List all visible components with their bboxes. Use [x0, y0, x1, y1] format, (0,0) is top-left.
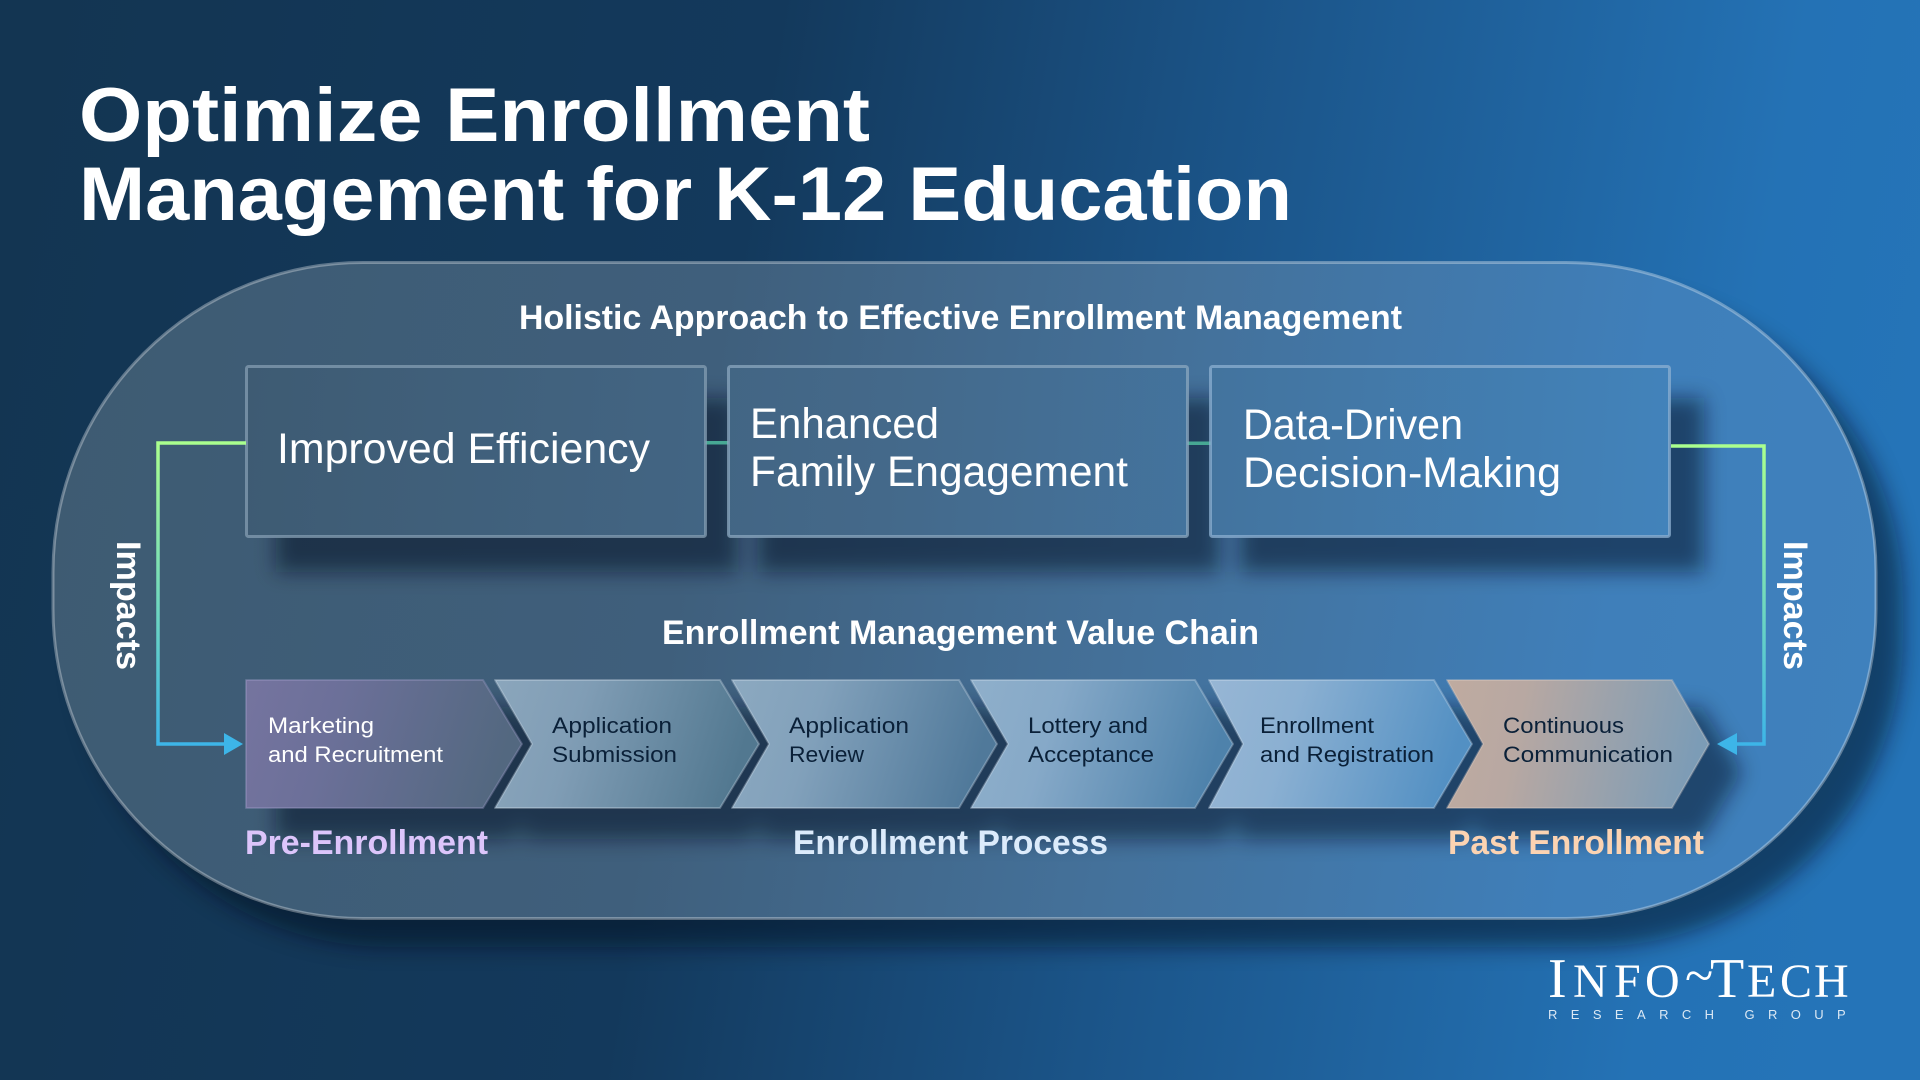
panel shadow — [77, 290, 1903, 947]
chevron shadows — [276, 707, 1742, 839]
label: enrollment process: Enrollment Process — [793, 824, 1108, 862]
label: pre-enrollment: Pre-Enrollment — [245, 824, 488, 862]
step: continuous communication: Continuous — [1503, 713, 1624, 738]
logo: info-tech research group: T — [1710, 948, 1744, 1010]
box: improved efficiency: Improved Efficiency — [277, 425, 650, 473]
logo: info-tech research group: I — [1548, 948, 1567, 1010]
label: left impacts: Impacts — [109, 541, 147, 670]
panel heading: Holistic Approach to Effective Enrollment Management — [519, 299, 1402, 337]
step: application review: Review — [789, 742, 864, 767]
box: enhanced family engagement — [728, 366, 1188, 536]
title — [79, 73, 1292, 237]
value chain heading: Enrollment Management Value Chain — [662, 614, 1259, 652]
step: application review — [732, 680, 997, 808]
box: enhanced family engagement: Family Engagement — [750, 448, 1128, 496]
logo: info-tech research group: RESEARCH GROUP — [1548, 1007, 1859, 1022]
step: continuous communication — [1447, 680, 1709, 808]
step: application submission — [495, 680, 759, 808]
label: right impacts: Impacts — [1776, 541, 1814, 670]
box: data-driven decision-making: Decision-Making — [1243, 449, 1561, 497]
step: application submission: Application — [552, 713, 672, 738]
arrow: right impacts — [1671, 446, 1764, 755]
title: Optimize Enrollment — [79, 73, 870, 158]
step: enrollment and registration: Enrollment — [1260, 713, 1374, 738]
box: data-driven decision-making — [1210, 366, 1670, 536]
logo: info-tech research group: ECH — [1747, 955, 1849, 1008]
step: marketing and recruitment: Marketing — [268, 713, 374, 738]
step: marketing and recruitment — [246, 680, 522, 808]
step: lottery and acceptance: Lottery and — [1028, 713, 1148, 738]
title: Management for K-12 Education — [79, 152, 1292, 237]
step: enrollment and registration — [1209, 680, 1472, 808]
step: marketing and recruitment: and Recruitment — [268, 742, 443, 767]
panel: holistic approach — [53, 262, 1876, 918]
step: lottery and acceptance: Acceptance — [1028, 742, 1154, 767]
step: application submission: Submission — [552, 742, 677, 767]
box shadows — [276, 398, 1704, 572]
box: enhanced family engagement: Enhanced — [750, 400, 939, 448]
box: improved efficiency — [246, 366, 706, 536]
step: continuous communication: Communication — [1503, 742, 1673, 767]
step: application review: Application — [789, 713, 909, 738]
value chain — [246, 680, 1709, 808]
logo: info-tech research group — [1548, 948, 1859, 1022]
label: past enrollment: Past Enrollment — [1448, 824, 1704, 862]
logo: info-tech research group: NFO — [1573, 955, 1680, 1008]
connector: between boxes — [704, 441, 1211, 445]
box: data-driven decision-making: Data-Driven — [1243, 401, 1463, 449]
step: enrollment and registration: and Registration — [1260, 742, 1434, 767]
logo: info-tech research group: ~ — [1685, 948, 1713, 1005]
step: lottery and acceptance — [971, 680, 1233, 808]
arrow: left impacts — [158, 443, 246, 755]
